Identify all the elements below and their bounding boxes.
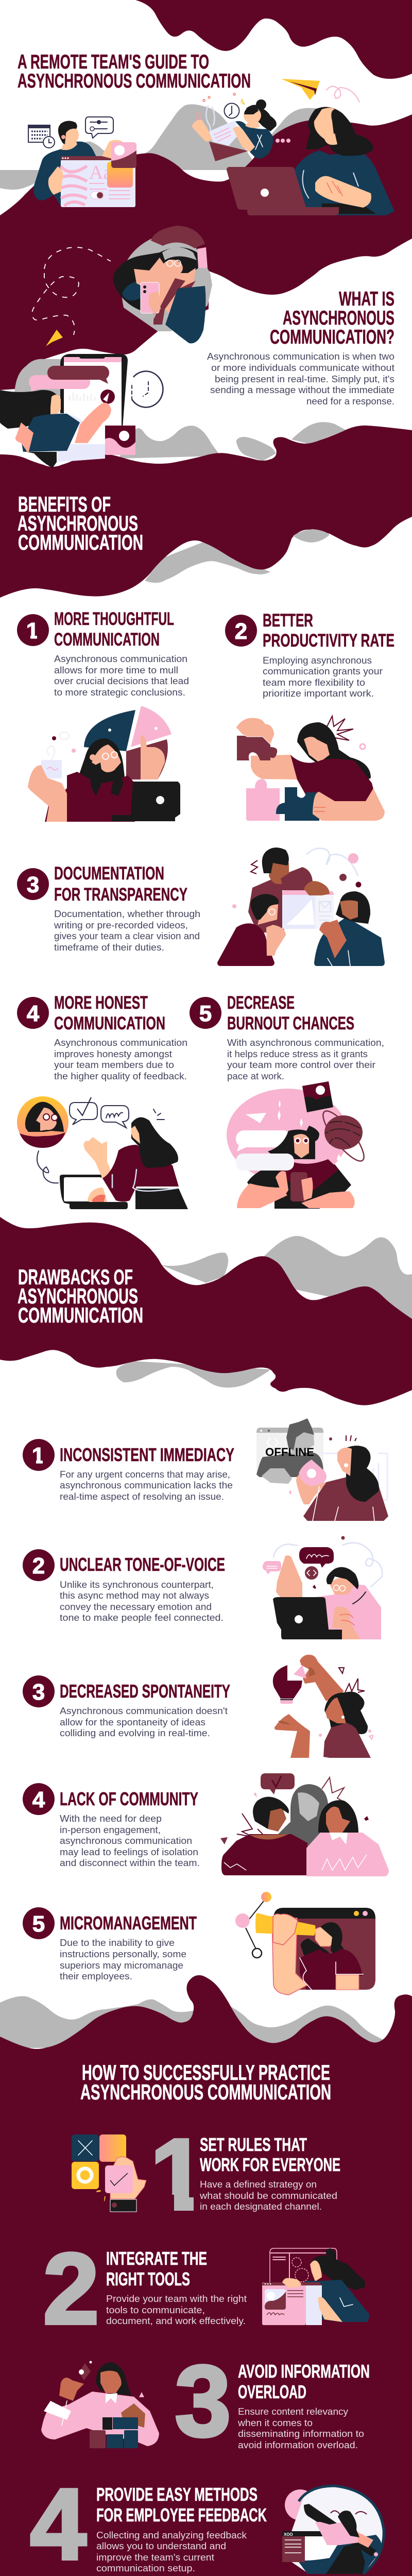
drawback 2 heading: UNCLEAR TONE-OF-VOICE [60, 1554, 225, 1575]
what is description: or more individuals communicate without [211, 363, 394, 373]
panel: drawback 3 decreased spontaneity [23, 1655, 373, 1758]
benefit 4 text: Asynchronous communication [54, 1038, 187, 1048]
benefit 3 heading: FOR TRANSPARENCY [54, 885, 187, 905]
drawback 4 text [60, 1814, 200, 1868]
illustration: woman arranging blocks [41, 2361, 159, 2448]
what is description [207, 351, 394, 406]
number badge 2: 2 [235, 619, 247, 644]
step 3 text: disseminating information to [238, 2429, 364, 2439]
drawback 2 text: tone to make people feel connected. [60, 1613, 224, 1623]
drawbacks heading: COMMUNICATION [18, 1303, 143, 1327]
step 1 set rules [72, 2134, 340, 2212]
benefit 3 heading [54, 863, 187, 905]
drawback 2 text: Unlike its synchronous counterpart, [60, 1580, 214, 1590]
step 2 integrate the right tools [43, 2232, 370, 2345]
benefit 3 text: timeframe of their duties. [54, 942, 164, 953]
benefit 3 text: writing or pre-recorded videos, [54, 920, 188, 930]
drawback 5 text: their employees. [60, 1971, 132, 1981]
benefit 5 heading: BURNOUT CHANCES [227, 1013, 354, 1033]
step 4 provide easy methods [30, 2468, 384, 2576]
drawback 3 text: allow for the spontaneity of ideas [60, 1717, 205, 1727]
benefit 1 text: to more strategic conclusions. [54, 687, 185, 698]
benefit 5 heading [227, 993, 354, 1033]
how to band wave background [0, 1975, 412, 2576]
benefit 5 text: your team more control over their [227, 1060, 375, 1070]
number badge 4 [17, 997, 49, 1029]
step 4 heading: FOR EMPLOYEE FEEDBACK [96, 2504, 267, 2526]
drawback 5 text [60, 1938, 186, 1981]
step 3 heading: OVERLOAD [238, 2381, 306, 2402]
drawback 4 text: may lead to feelings of isolation [60, 1847, 198, 1857]
benefit 3 text: gives your team a clear vision and [54, 931, 200, 941]
panel: benefit 1 more thoughtful communication [17, 609, 189, 822]
benefits heading: ASYNCHRONOUS [18, 511, 138, 535]
number badge 4: 4 [27, 1001, 40, 1026]
number badge 2: 2 [32, 1553, 45, 1579]
benefits heading [18, 492, 143, 554]
drawback 3 text [60, 1706, 228, 1738]
illustration: offline colleague on screen and woman: OFFLINE [265, 1446, 314, 1459]
panel: drawback 2 unclear tone of voice [23, 1536, 382, 1639]
benefit 5 text: pace at work. [227, 1071, 284, 1081]
illustration: man with tablet: Aa [89, 162, 112, 183]
panel: benefit 2 better productivity rate [225, 611, 394, 821]
benefit 1 heading [54, 609, 174, 650]
drawback 1 text: asynchronous communication lacks the [60, 1480, 233, 1490]
step 4 text: allows you to understand and [96, 2541, 226, 2551]
panel: benefit 3 documentation for transparency [17, 848, 385, 966]
illustration: woman holding giant pen: XOO [284, 2532, 293, 2537]
benefit 4 text: your team members due to [54, 1060, 174, 1070]
benefit 1 text [54, 654, 189, 698]
number badge 1 [23, 1439, 55, 1471]
drawback 1 text: real-time aspect of resolving an issue. [60, 1492, 224, 1502]
illustration: woman holding giant pen [282, 2485, 384, 2574]
step 3 avoid information overload [41, 2345, 370, 2458]
drawback 4 text: in-person engagement, [60, 1825, 161, 1835]
benefit 5 text: it helps reduce stress as it grants [227, 1049, 368, 1059]
step 3 text: when it comes to [237, 2418, 313, 2428]
drawbacks heading: ASYNCHRONOUS [18, 1284, 138, 1308]
drawback 1 heading: INCONSISTENT IMMEDIACY [60, 1444, 234, 1465]
benefits heading: BENEFITS OF [18, 492, 111, 516]
benefit 2 text: Employing asynchronous [263, 655, 372, 666]
big number 3: 3 [175, 2345, 231, 2458]
panel: benefit 4 more honest communication [17, 993, 188, 1209]
step 2 text [106, 2294, 247, 2326]
title [18, 51, 251, 92]
step 2 heading: RIGHT TOOLS [106, 2268, 190, 2290]
benefit 4 text: improves honesty amongst [54, 1049, 172, 1059]
benefit 2 heading: BETTER [263, 611, 313, 631]
number badge 1: 1 [32, 1443, 44, 1468]
benefit 5 heading: DECREASE [227, 993, 295, 1013]
benefit 2 text: prioritize important work. [263, 688, 374, 699]
panel: drawback 5 micromanagement [23, 1907, 197, 1981]
panel: drawback 4 lack of community [23, 1773, 389, 1876]
step 3 text [237, 2406, 364, 2450]
step 2 text: tools to communicate, [106, 2305, 205, 2315]
step 1 heading: WORK FOR EVERYONE [200, 2154, 340, 2175]
drawback 5 heading: MICROMANAGEMENT [60, 1912, 197, 1934]
benefit 3 heading: DOCUMENTATION [54, 863, 164, 884]
illustration: tic tac toe tiles and hand [72, 2134, 146, 2212]
benefits band wave background [0, 422, 412, 598]
step 2 text: document, and work effectively. [106, 2316, 246, 2326]
number badge 3 [23, 1675, 55, 1707]
drawbacks heading: DRAWBACKS OF [18, 1265, 133, 1289]
panel: drawback 1 inconsistent immediacy [23, 1418, 388, 1521]
illustration: woman opening envelope [192, 93, 277, 161]
step 1 text [199, 2179, 337, 2212]
benefit 4 text [54, 1038, 187, 1081]
dashed flight path and small plane [32, 247, 111, 346]
drawback 2 text: convey the necessary emotion and [60, 1602, 212, 1612]
number badge 3: 3 [32, 1680, 45, 1705]
number badge 1 [17, 614, 49, 646]
benefit 2 text: communication grants your [263, 666, 383, 676]
number badge 5: 5 [32, 1911, 45, 1937]
drawback 5 text: superiors may micromanage [60, 1960, 183, 1971]
what is description: need for a response. [306, 396, 394, 406]
illustration: woman assembling lightbulb idea [273, 1655, 373, 1758]
drawback 3 text: colliding and evolving in real-time. [60, 1728, 210, 1738]
illustration: woman on video call with feedback bubbles [17, 1096, 188, 1209]
number badge 2 [225, 615, 257, 647]
step 2 heading: INTEGRATE THE [106, 2248, 207, 2269]
drawback 2 text [60, 1580, 224, 1623]
step 4 text: improve the team's current [96, 2552, 214, 2563]
drawback 4 text: asynchronous communication [60, 1836, 192, 1846]
drawback 4 text: and disconnect within the team. [60, 1858, 200, 1868]
benefit 2 text: team more flexibility to [263, 677, 365, 688]
step 2 text: Provide your team with the right [106, 2294, 247, 2304]
step 4 heading: PROVIDE EASY METHODS [96, 2484, 258, 2505]
step 1 heading [200, 2134, 340, 2175]
benefit 3 text: Documentation, whether through [54, 909, 200, 919]
illustration: woman looking at phone [113, 226, 212, 343]
number badge 5 [190, 997, 221, 1029]
number badge 2 [23, 1549, 55, 1581]
illustration: woman with laptop [227, 107, 394, 215]
drawback 2 text: this async method may not always [60, 1590, 209, 1601]
drawback 5 text: Due to the inability to give [60, 1938, 175, 1948]
illustration: man at laptop with speech bubbles [263, 1536, 382, 1639]
number badge 3: 3 [27, 872, 39, 897]
drawbacks heading [18, 1265, 143, 1327]
drawback 1 text [60, 1469, 233, 1502]
illustration: offline colleague on screen and woman [256, 1418, 388, 1521]
benefit 4 heading: COMMUNICATION [54, 1013, 165, 1033]
benefit 1 text: allows for more time to mull [54, 665, 178, 675]
panel: benefit 5 decrease burnout chances [190, 993, 384, 1209]
illustration: woman spying through binoculars [235, 1892, 375, 1995]
drawbacks band wave background [0, 1217, 412, 1405]
step 4 heading [96, 2484, 267, 2526]
benefit 5 text [227, 1038, 384, 1081]
what is description: being present in real-time. Simply put, it's [215, 374, 394, 384]
drawback 5 text: instructions personally, some [60, 1949, 186, 1959]
illustration: woman with pie chart and mug [28, 706, 180, 822]
benefit 1 heading: MORE THOUGHTFUL [54, 609, 174, 629]
benefit 4 text: the higher quality of feedback. [54, 1071, 187, 1081]
step 1 text: what should be communicated [199, 2191, 337, 2201]
number badge 5 [23, 1907, 55, 1939]
how to heading [80, 2060, 331, 2104]
number badge 5: 5 [199, 1001, 212, 1026]
number badge 4: 4 [32, 1787, 45, 1812]
big number 1: 1 [150, 2118, 207, 2231]
icon: paper plane and squiggle [281, 79, 359, 102]
step 3 text: avoid information overload. [238, 2440, 358, 2450]
illustration: phone with chat bubbles and woman [0, 354, 163, 468]
benefit 1 heading: COMMUNICATION [54, 630, 160, 650]
benefit 4 heading [54, 993, 165, 1033]
title: ASYNCHRONOUS COMMUNICATION [18, 70, 251, 92]
drawback 1 text: For any urgent concerns that may arise, [60, 1469, 230, 1480]
illustration: man with tablet [28, 117, 136, 207]
illustration: woman with app windows and gears [262, 2248, 370, 2325]
benefit 2 text [263, 655, 383, 699]
benefit 3 text [54, 909, 200, 953]
illustration: woman with puzzle pieces [236, 716, 385, 821]
benefit 1 text: Asynchronous communication [54, 654, 187, 664]
step 1 text: in each designated channel. [200, 2201, 322, 2212]
illustration: woman with phone and planet [227, 1081, 370, 1209]
drawback 4 heading: LACK OF COMMUNITY [60, 1788, 198, 1809]
benefit 5 text: With asynchronous communication, [227, 1038, 384, 1048]
drawback 4 text: With the need for deep [60, 1814, 162, 1824]
what is description: Asynchronous communication is when two [207, 351, 394, 362]
step 2 heading [106, 2248, 207, 2290]
hero wave background [0, 0, 412, 397]
illustration: three colleagues with tablet [217, 848, 385, 966]
illustration: three colleagues with one greyed out [220, 1773, 389, 1876]
drawback 3 heading: DECREASED SPONTANEITY [60, 1681, 230, 1702]
number badge 3 [17, 868, 49, 900]
step 4 text: communication setup. [96, 2563, 195, 2573]
title: A REMOTE TEAM'S GUIDE TO [18, 51, 209, 73]
number badge 1: 1 [26, 618, 39, 643]
big number 2: 2 [43, 2232, 99, 2345]
benefit 2 heading [263, 611, 394, 651]
benefit 4 heading: MORE HONEST [54, 993, 148, 1013]
what is description: sending a message without the immediate [210, 385, 394, 395]
step 3 text: Ensure content relevancy [238, 2406, 348, 2417]
step 1 text: Have a defined strategy on [200, 2179, 317, 2190]
step 1 heading: SET RULES THAT [200, 2134, 307, 2155]
what is heading [270, 288, 394, 348]
step 4 text [96, 2530, 247, 2573]
benefits heading: COMMUNICATION [18, 530, 143, 554]
step 3 heading [238, 2361, 370, 2402]
number badge 4 [23, 1783, 55, 1815]
drawback 3 text: Asynchronous communication doesn't [60, 1706, 228, 1716]
step 4 text: Collecting and analyzing feedback [96, 2530, 247, 2540]
benefit 1 text: over crucial decisions that lead [54, 676, 189, 686]
